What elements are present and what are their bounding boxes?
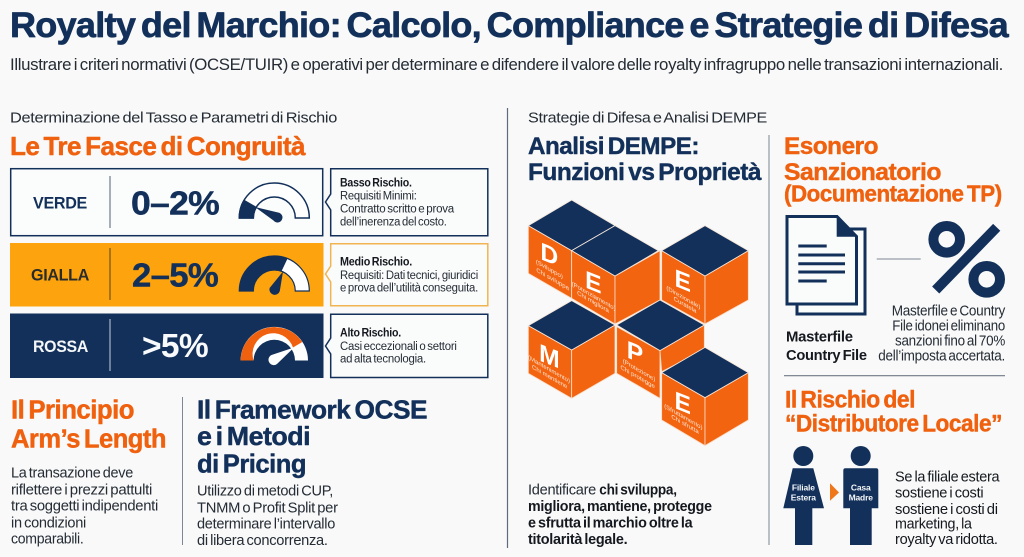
cube: P: (Protezione): [623, 358, 655, 383]
text: esonero: [878, 304, 1006, 365]
panel: fascia gialla: [10, 243, 324, 306]
cube: M: (Mantenimento): [528, 354, 570, 385]
heading: Il Framework OCSE: [197, 394, 427, 478]
heading: Le Tre Fasce di Congruità: Le Tre Fasce di Congruità: [10, 131, 306, 161]
callout: alto rischio: ad alta tecnologia.: [340, 354, 426, 366]
value: >5%: >5%: [142, 327, 208, 364]
label: GIALLA: GIALLA: [31, 266, 89, 285]
section heading: left column: Determinazione del Tasso e Parametri di Rischio: [10, 110, 337, 127]
text: identificare: e sfrutta il marchio oltre la: [528, 516, 694, 532]
text: esonero: File idonei eliminano: [892, 319, 1005, 335]
cube: E sfruttamento: (Sfruttamento): [664, 403, 702, 432]
callout: medio rischio: Requisiti: Dati tecnici, giuridici: [340, 270, 478, 282]
icon: gauge alto: [241, 327, 308, 365]
callout: alto rischio: Casi eccezionali o settori: [340, 341, 457, 353]
callout: medio rischio: e prova dell’utilità conseguita.: [340, 283, 478, 295]
title: Royalty del Marchio: Calcolo, Compliance e Strategie di Difesa: [10, 5, 1009, 45]
subtitle: Illustrare i criteri normativi (OCSE/TUIR) e operativi per determinare e difendere il valore delle royalty infragruppo nelle transazioni internazionali.: [10, 56, 1003, 74]
text: principio: riflettere i prezzi pattulti: [11, 482, 152, 498]
callout: alto rischio: [326, 314, 488, 378]
heading: Esonero Sanzionatorio: [784, 133, 1002, 207]
cube: E miglioramento: E: [585, 266, 602, 300]
heading: Esonero Sanzionatorio: Esonero: [784, 133, 879, 160]
text: esonero: sanzioni fino al 70%: [895, 334, 1005, 350]
heading: Il Principio Arm's Length: Arm’s Length: [11, 426, 166, 454]
icon: casa madre: Casa: [851, 483, 871, 493]
text: principio: comparabili.: [11, 531, 84, 547]
text: metodi: determinare l’intervallo: [197, 516, 335, 532]
heading: Il Rischio del Distributore Locale: “Distributore Locale”: [785, 411, 1002, 438]
cube: E miglioramento: Chi migliora: [577, 290, 609, 315]
cube: M: M: [539, 339, 560, 375]
callout: basso rischio: dell’inerenza del costo.: [340, 217, 447, 229]
cube: E sfruttamento: Chi sfrutta: [671, 413, 699, 436]
panel: principio arm's length: [11, 396, 166, 547]
label: Masterfile Country File: Country File: [786, 348, 867, 364]
panel: fascia rossa: [10, 314, 324, 378]
text: principio: in condizioni: [11, 515, 86, 531]
label: VERDE: VERDE: [33, 193, 87, 212]
cube: E sfruttamento: E: [674, 387, 691, 420]
cube: P: P: [627, 336, 643, 370]
value: 0–2%: 0–2%: [131, 184, 219, 221]
heading: Esonero Sanzionatorio: Sanzionatorio: [784, 159, 942, 186]
callout: medio rischio: [326, 244, 488, 306]
text: distributore: sostiene i costi di: [895, 502, 998, 518]
text: principio: tra soggetti indipendenti: [11, 499, 158, 515]
callout: medio rischio: Medio Rischio.: [340, 257, 412, 269]
icon: filiale estera: Filiale: [792, 483, 815, 493]
panel: framework OCSE: [197, 394, 427, 549]
icon: gauge medio: [239, 256, 309, 295]
label: ROSSA: ROSSA: [33, 337, 88, 356]
icon: casa madre: [843, 446, 878, 545]
section heading: right column: Strategie di Difesa e Analisi DEMPE: [528, 110, 767, 127]
text: identificare: chi sviluppa,: [599, 482, 677, 498]
cube: E miglioramento: [572, 226, 660, 324]
text: distributore: marketing, la: [895, 516, 973, 532]
heading: Il Framework OCSE: di Pricing: [197, 448, 306, 478]
cube: E direzione: Curatela: [674, 296, 697, 315]
chart: cubi DEMPE: [528, 200, 748, 446]
heading: Analisi DEMPE: Funzioni vs Proprietà: [528, 159, 762, 186]
callout: basso rischio: Basso Rischio.: [340, 178, 412, 190]
label: Masterfile Country File: [786, 330, 867, 364]
callout: basso rischio: [326, 169, 488, 236]
icon: gauge basso: [239, 183, 309, 222]
callout: alto rischio: Alto Rischio.: [340, 328, 401, 340]
text: identificare: migliora, mantiene, protegge: [528, 499, 712, 515]
text: metodi: TNMM o Profit Split per: [197, 500, 338, 516]
icon: documenti: [787, 216, 865, 314]
panel: fascia verde: [11, 169, 323, 236]
label: Masterfile Country File: Masterfile: [786, 330, 853, 346]
cube: E direzione: E: [674, 265, 691, 298]
cube: M: Chi mantiene: [532, 364, 568, 391]
text: esonero: dell’imposta accertata.: [878, 349, 1005, 365]
heading: Esonero Sanzionatorio: (Documentazione TP): [784, 181, 1002, 207]
text: distributore: Se la filiale estera: [895, 470, 1001, 486]
cube: D: Chi sviluppa: [536, 267, 569, 292]
text: principio: La transazione deve: [11, 466, 133, 482]
text: distributore: [895, 470, 1001, 548]
text: identificare: Identificare: [528, 482, 596, 498]
heading: Il Rischio del Distributore Locale: Il Rischio del: [785, 386, 915, 413]
cube: P: [617, 300, 704, 398]
callout: basso rischio: Contratto scritto e prova: [340, 204, 455, 216]
icon: casa madre: Madre: [849, 493, 873, 503]
text: distributore: sostiene i costi: [895, 485, 983, 501]
text: principio: [11, 466, 158, 547]
cube: E direzione: (Direzionale): [666, 285, 700, 311]
text: identificare: [528, 482, 712, 548]
cube: E direzione: [662, 226, 748, 324]
icon: filiale estera: [783, 446, 824, 545]
callout: basso rischio: Requisiti Minimi:: [340, 190, 417, 202]
arrow: [830, 483, 839, 501]
icon: filiale estera: Estera: [791, 493, 816, 503]
cube: M: [528, 301, 615, 398]
heading: Il Framework OCSE: e i Metodi: [197, 421, 310, 451]
text: metodi: Utilizzo di metodi CUP,: [197, 484, 333, 500]
heading: Il Framework OCSE: Il Framework OCSE: [197, 394, 427, 424]
value: 2–5%: 2–5%: [132, 257, 218, 294]
text: metodi: di libera concorrenza.: [197, 533, 328, 549]
heading: Analisi DEMPE: Analisi DEMPE:: [528, 133, 699, 160]
icon: percentuale: [933, 226, 1000, 293]
text: metodi: [197, 484, 338, 549]
cube: D: (Sviluppo): [536, 259, 563, 281]
text: identificare: titolarità legale.: [528, 532, 628, 548]
heading: Analisi DEMPE: [528, 133, 762, 186]
cube: E miglioramento: (Potenziamento): [572, 281, 616, 313]
cube: E sfruttamento: [662, 347, 748, 446]
cube: D: [528, 200, 615, 298]
text: esonero: Masterfile e Country: [892, 304, 1006, 320]
heading: Il Principio Arm's Length: [11, 396, 166, 454]
text: distributore: royalty va ridotta.: [895, 532, 998, 548]
cube: P: Chi protegge: [621, 364, 655, 391]
cube: D: D: [540, 238, 558, 272]
heading: Il Rischio del Distributore Locale: [785, 386, 1002, 438]
heading: Il Principio Arm's Length: Il Principio: [11, 396, 134, 424]
